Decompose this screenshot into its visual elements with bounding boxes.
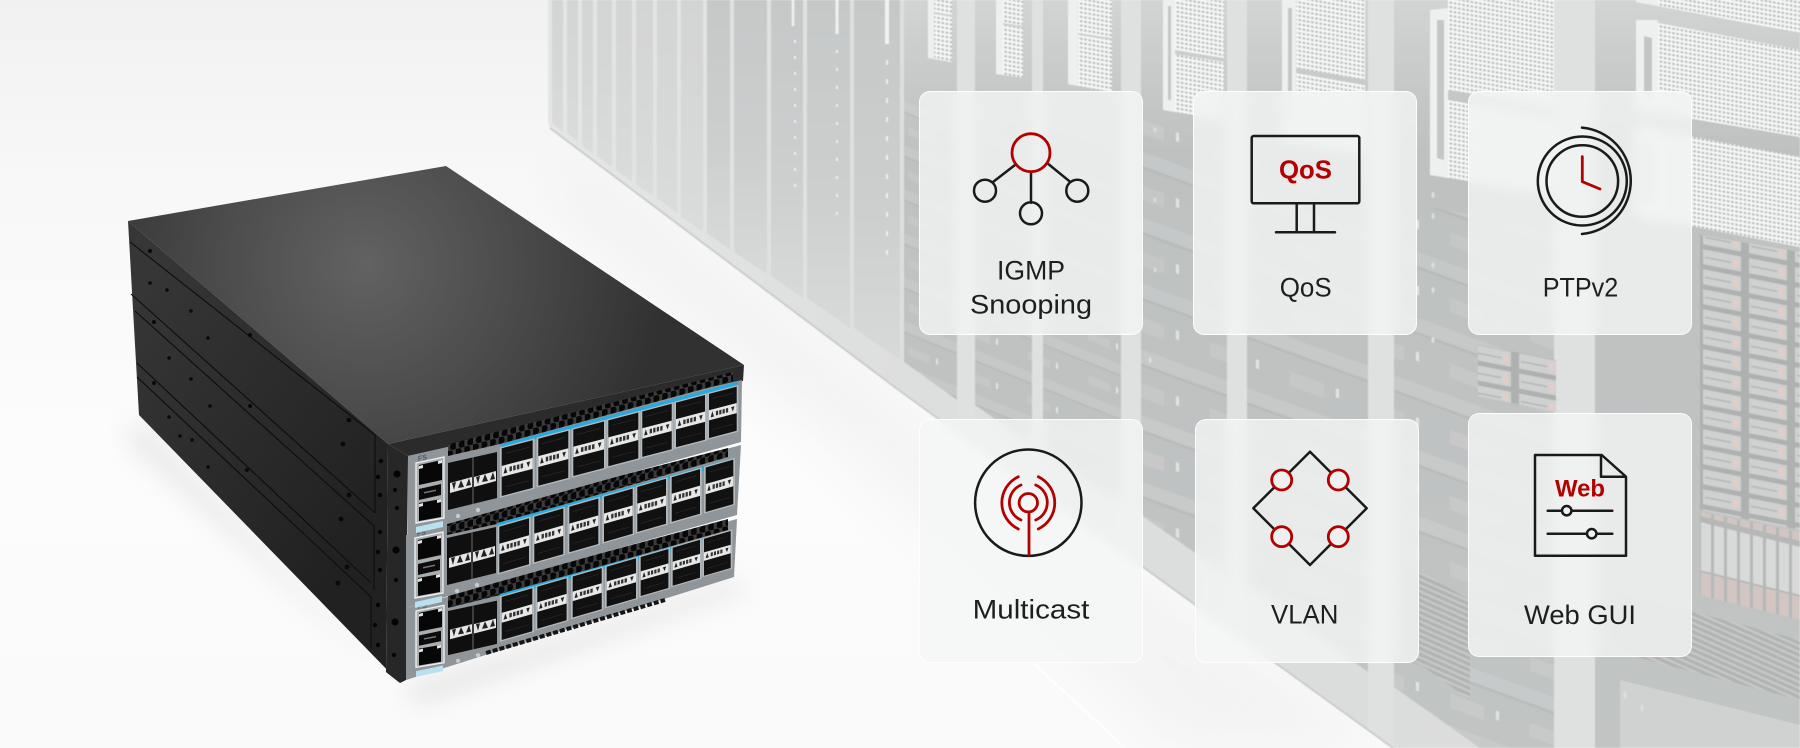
card: Web GUI <box>1468 413 1692 657</box>
status LEDs <box>1149 128 1644 712</box>
rack base shadow line <box>550 128 1393 748</box>
label: Web GUI: Web GUI <box>1524 600 1636 630</box>
card: Multicast <box>919 419 1143 663</box>
drive bay arrays <box>1400 235 1800 748</box>
label: IGMP Snooping <box>970 255 1092 319</box>
label: IGMP Snooping: IGMP <box>996 255 1064 285</box>
floor reflection of the racks <box>560 150 1393 748</box>
switch unit 2 <box>406 445 741 608</box>
server handles <box>928 0 1658 220</box>
icon: web document: Web <box>1554 475 1604 502</box>
front lip <box>388 365 744 456</box>
label: IGMP Snooping: Snooping <box>970 289 1092 319</box>
server rack row <box>548 0 1800 748</box>
icon: web document <box>1534 454 1626 555</box>
near racks <box>904 0 1800 748</box>
label: VLAN: VLAN <box>1270 599 1338 629</box>
switch unit 1 <box>408 372 742 535</box>
bright server fronts with grills <box>934 0 1800 247</box>
server chassis rows in near racks <box>904 100 1554 748</box>
front ear <box>386 444 408 683</box>
floor light streak <box>1030 660 1125 748</box>
label: QoS: QoS <box>1279 272 1331 302</box>
card: QoS <box>1193 91 1417 335</box>
chassis seams <box>130 242 375 648</box>
icon: QoS monitor <box>1251 136 1359 232</box>
server handle slots <box>1168 6 1652 205</box>
card: PTPv2 <box>1468 91 1692 335</box>
icon: clock with rings <box>1537 127 1630 234</box>
card: IGMP Snooping <box>919 91 1143 335</box>
side screws <box>148 249 351 585</box>
rack body <box>548 0 1800 748</box>
switch side face <box>128 221 400 683</box>
label: PTPv2: PTPv2 <box>1542 272 1618 302</box>
icon: antenna in circle <box>975 449 1081 555</box>
label: Multicast: Multicast <box>972 594 1089 624</box>
far racks <box>552 0 900 360</box>
switch top face <box>128 166 744 444</box>
ear holes <box>373 459 401 657</box>
rack frame uprights <box>957 0 1595 748</box>
icon: multicast tree <box>974 133 1088 224</box>
shadow under switch stack <box>125 420 750 705</box>
far rack indicator specks <box>793 0 887 260</box>
icon: QoS monitor: QoS <box>1278 154 1332 184</box>
icon: VLAN diamond <box>1253 451 1366 564</box>
card: VLAN <box>1195 419 1419 663</box>
switch stack <box>128 166 744 683</box>
switch unit 3 <box>406 519 737 680</box>
